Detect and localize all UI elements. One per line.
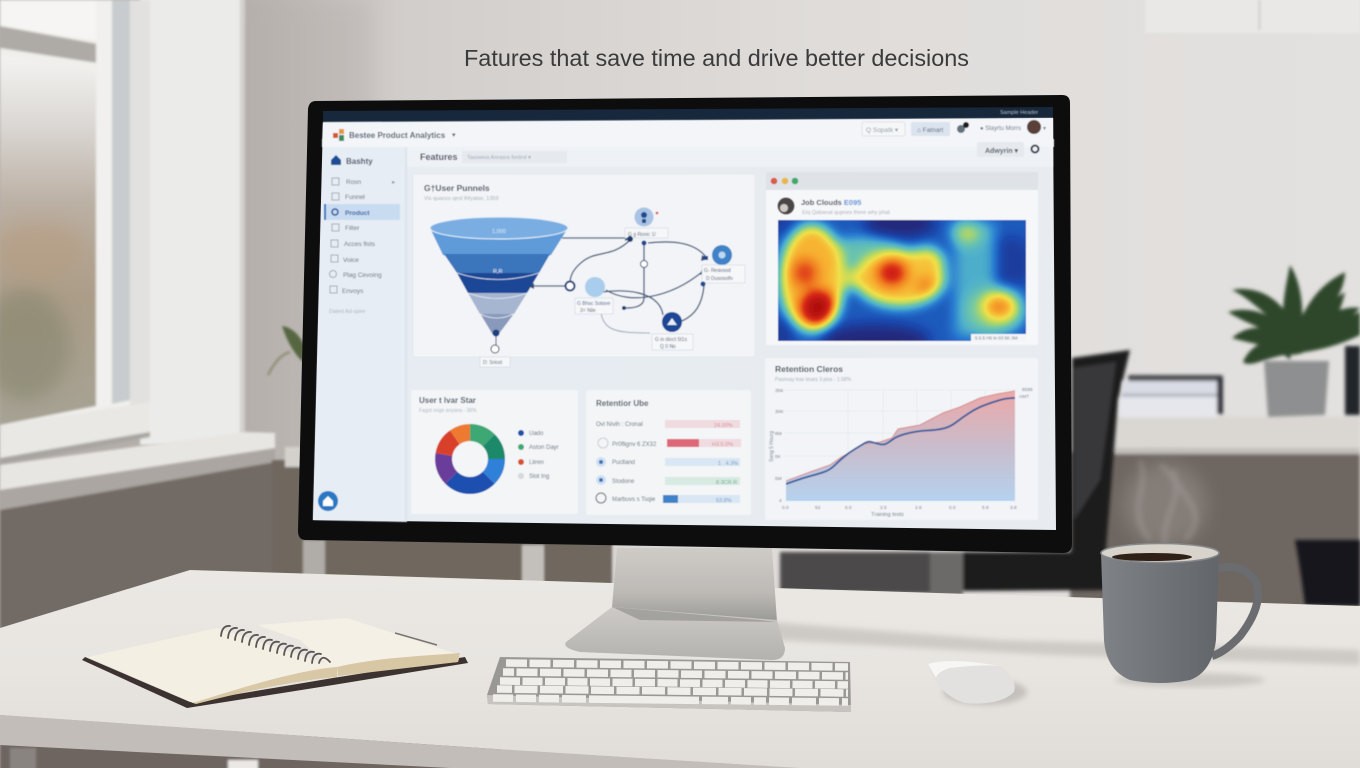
axis labels: 5K <box>775 454 782 460</box>
axis labels: 2.6 <box>915 505 922 511</box>
mug body <box>1101 553 1219 683</box>
donut chart <box>433 422 507 496</box>
axis labels: 0.0 <box>949 505 956 511</box>
spiral binding <box>221 626 330 663</box>
node: bottom: Q 0 No <box>660 344 676 350</box>
sidebar menu text: Acces fists <box>344 241 376 248</box>
axis labels: 8M <box>775 431 782 437</box>
panel: job clouds heatmap: 5.5.5 H5 In 03 5K 3M <box>975 336 1018 340</box>
node: hollow connector <box>640 260 648 268</box>
donut legend: Slot Ing <box>529 474 549 480</box>
row 3: Puclland <box>612 460 635 466</box>
analysis dropdown <box>977 142 1024 157</box>
window <box>0 0 245 465</box>
search box <box>862 122 905 136</box>
settings gear <box>1032 146 1038 152</box>
donut legend: Uado <box>529 431 544 437</box>
bottom home button <box>318 491 338 511</box>
key rows <box>493 663 848 702</box>
funnel chart: R,R <box>493 269 502 275</box>
panel: user funnels: Vis quanzs qesl thfyatse, 1359 <box>424 196 499 202</box>
row 5: Marbuvs s Tsqie <box>612 497 656 503</box>
panel: user funnels <box>413 174 755 367</box>
axis labels: Training tests <box>871 512 904 518</box>
under-desk area <box>0 735 500 768</box>
donut legend <box>518 430 559 480</box>
panel: retention curve <box>765 358 1038 520</box>
node: left: G Bhsc Sotave <box>577 301 611 307</box>
axis labels: 3.8 <box>1010 505 1017 511</box>
node: top: G g Ronic 1/ <box>628 232 656 238</box>
axis labels: 5.8 <box>982 505 989 511</box>
stack of papers <box>1120 375 1223 417</box>
coffee <box>1112 553 1192 561</box>
top bar <box>322 110 1054 147</box>
row 1: 24.00% <box>714 423 733 429</box>
sidebar menu text: Dated Ad-spire <box>329 309 365 315</box>
wall poster <box>1145 0 1360 33</box>
keyboard <box>487 657 851 712</box>
notification icon <box>957 122 969 133</box>
node: right: D Dusosolfv <box>706 276 733 282</box>
panel: user donut: User t lvar Star <box>419 396 476 405</box>
button: ⌂ Fatnart <box>917 127 944 134</box>
top bar: Sample Header <box>1000 110 1038 116</box>
row 3: 1 . 4.3% <box>718 461 738 467</box>
analysis dropdown: Adwyrin ▾ <box>985 148 1019 155</box>
title: Fatures that save time and drive better decisions <box>464 45 969 71</box>
monitor <box>298 95 1072 553</box>
sidebar menu text: Voice <box>343 257 359 264</box>
row 1: Ovl Nivih : Cronal <box>596 422 643 428</box>
panel: job clouds heatmap <box>766 172 1038 345</box>
mug handle <box>1212 567 1258 656</box>
axis labels: 53 <box>815 505 821 511</box>
button <box>911 122 950 136</box>
axis labels: 4 <box>779 498 782 504</box>
window controls <box>771 178 798 184</box>
panel: retention curve: Retention Cleros <box>775 364 843 374</box>
top bar: ▾ <box>1043 126 1046 132</box>
panel: job clouds heatmap: Job Clouds E095 <box>801 198 861 207</box>
donut legend: Liiren <box>529 460 544 466</box>
sidebar menu text: Plag Cevoing <box>343 272 382 279</box>
axis labels: 0.0 <box>782 505 789 511</box>
axis labels <box>769 387 1033 518</box>
panel: user donut <box>411 390 578 514</box>
heatmap <box>777 219 1027 342</box>
node: bottom: G in dioct 5t1s <box>655 337 687 343</box>
coffee mug <box>1101 544 1265 687</box>
mouse <box>928 661 1027 705</box>
coffee steam <box>1123 460 1207 547</box>
row 2: H3.5.0% <box>712 442 733 448</box>
bezel <box>298 95 1072 553</box>
top bar: ● Slayrtu Morrs <box>980 126 1021 132</box>
axis labels: 35K <box>775 388 784 394</box>
sidebar menu icons <box>330 178 339 293</box>
panel: user donut: Fagot orige anyana - 38% <box>419 408 477 414</box>
sidebar menu text: Rosn <box>346 179 362 186</box>
panel: user funnels: G†User Punnels <box>424 183 490 193</box>
panel: retention table: Retentior Ube <box>596 399 649 408</box>
search box: Q Sopatk ▾ <box>866 127 899 134</box>
funnel chart: D: Sriost <box>483 360 503 366</box>
features sub header: Tasswiva Areasra fontrol ▾ <box>467 155 531 161</box>
sidebar menu text: Envoys <box>342 288 364 295</box>
potted plant <box>1228 265 1360 417</box>
features sub header <box>407 142 1053 167</box>
row 4: 8.3CR.R <box>716 480 737 486</box>
node: left <box>566 277 626 314</box>
sidebar <box>313 147 407 522</box>
axis labels: 8595 <box>1022 387 1033 393</box>
funnel chart: 1,000 <box>492 229 506 235</box>
row 5 <box>596 493 740 504</box>
node: left: 3= Nile <box>580 308 596 314</box>
sidebar menu text: Product <box>345 210 370 217</box>
pot <box>1264 361 1329 417</box>
row 5: 53.8% <box>716 498 732 504</box>
app logo <box>333 129 344 141</box>
monitor shadow on desk <box>770 622 1360 665</box>
row 4: Stodone <box>612 479 635 485</box>
sidebar menu text: Filter <box>345 225 360 232</box>
donut legend: Aston Dayr <box>529 445 559 451</box>
axis labels: 2.5 <box>880 505 887 511</box>
notebook <box>82 618 468 708</box>
top bar: ▾ <box>452 132 456 139</box>
node: top <box>625 208 668 246</box>
row 3 <box>596 457 740 467</box>
background plant behind monitor <box>268 326 304 375</box>
screen <box>313 117 1056 530</box>
features sub header: Features <box>420 152 458 162</box>
axis labels: Sang 5 Hourg <box>769 431 775 462</box>
avatar <box>778 198 794 214</box>
office chair <box>780 350 1360 606</box>
node: right <box>700 245 745 286</box>
active item highlight <box>324 204 400 220</box>
node: bottom <box>652 312 693 350</box>
row 4 <box>596 475 740 486</box>
flow network <box>528 208 745 350</box>
row 1 <box>596 420 740 429</box>
node: right: G- Reavsod <box>704 268 731 274</box>
axis labels: 5.0 <box>845 505 852 511</box>
arrowheads <box>528 235 708 289</box>
window glass with outside view <box>0 55 96 425</box>
sidebar: Bashty <box>346 157 373 166</box>
panel: retention curve: Paonvay tras teues 3 pios - 1.58% <box>775 377 852 383</box>
user avatar <box>1027 120 1041 134</box>
top bar: Bestee Product Analytics <box>349 131 446 140</box>
row 2 <box>598 438 741 448</box>
desk <box>0 570 1360 768</box>
sidebar menu text: ▸ <box>392 179 396 186</box>
panel: retention table <box>586 390 751 515</box>
axis labels: 5M <box>775 476 782 482</box>
funnel chart <box>430 217 568 367</box>
panel: job clouds heatmap: Etq Qabanal qupnes there why phat <box>802 210 890 216</box>
sidebar menu text <box>329 179 396 315</box>
row 2: Pr0flignv 6 ZX32 <box>612 442 657 448</box>
leaves <box>1228 265 1360 364</box>
monitor stand <box>565 548 785 660</box>
line chart <box>769 387 1033 518</box>
sidebar menu text: Funnel <box>345 194 365 201</box>
axis labels: AMT <box>1019 394 1029 400</box>
home icon <box>331 155 341 165</box>
back shelf desk <box>1070 417 1360 607</box>
axis labels: 30K <box>775 409 784 415</box>
window sill and lower wall <box>0 432 612 640</box>
